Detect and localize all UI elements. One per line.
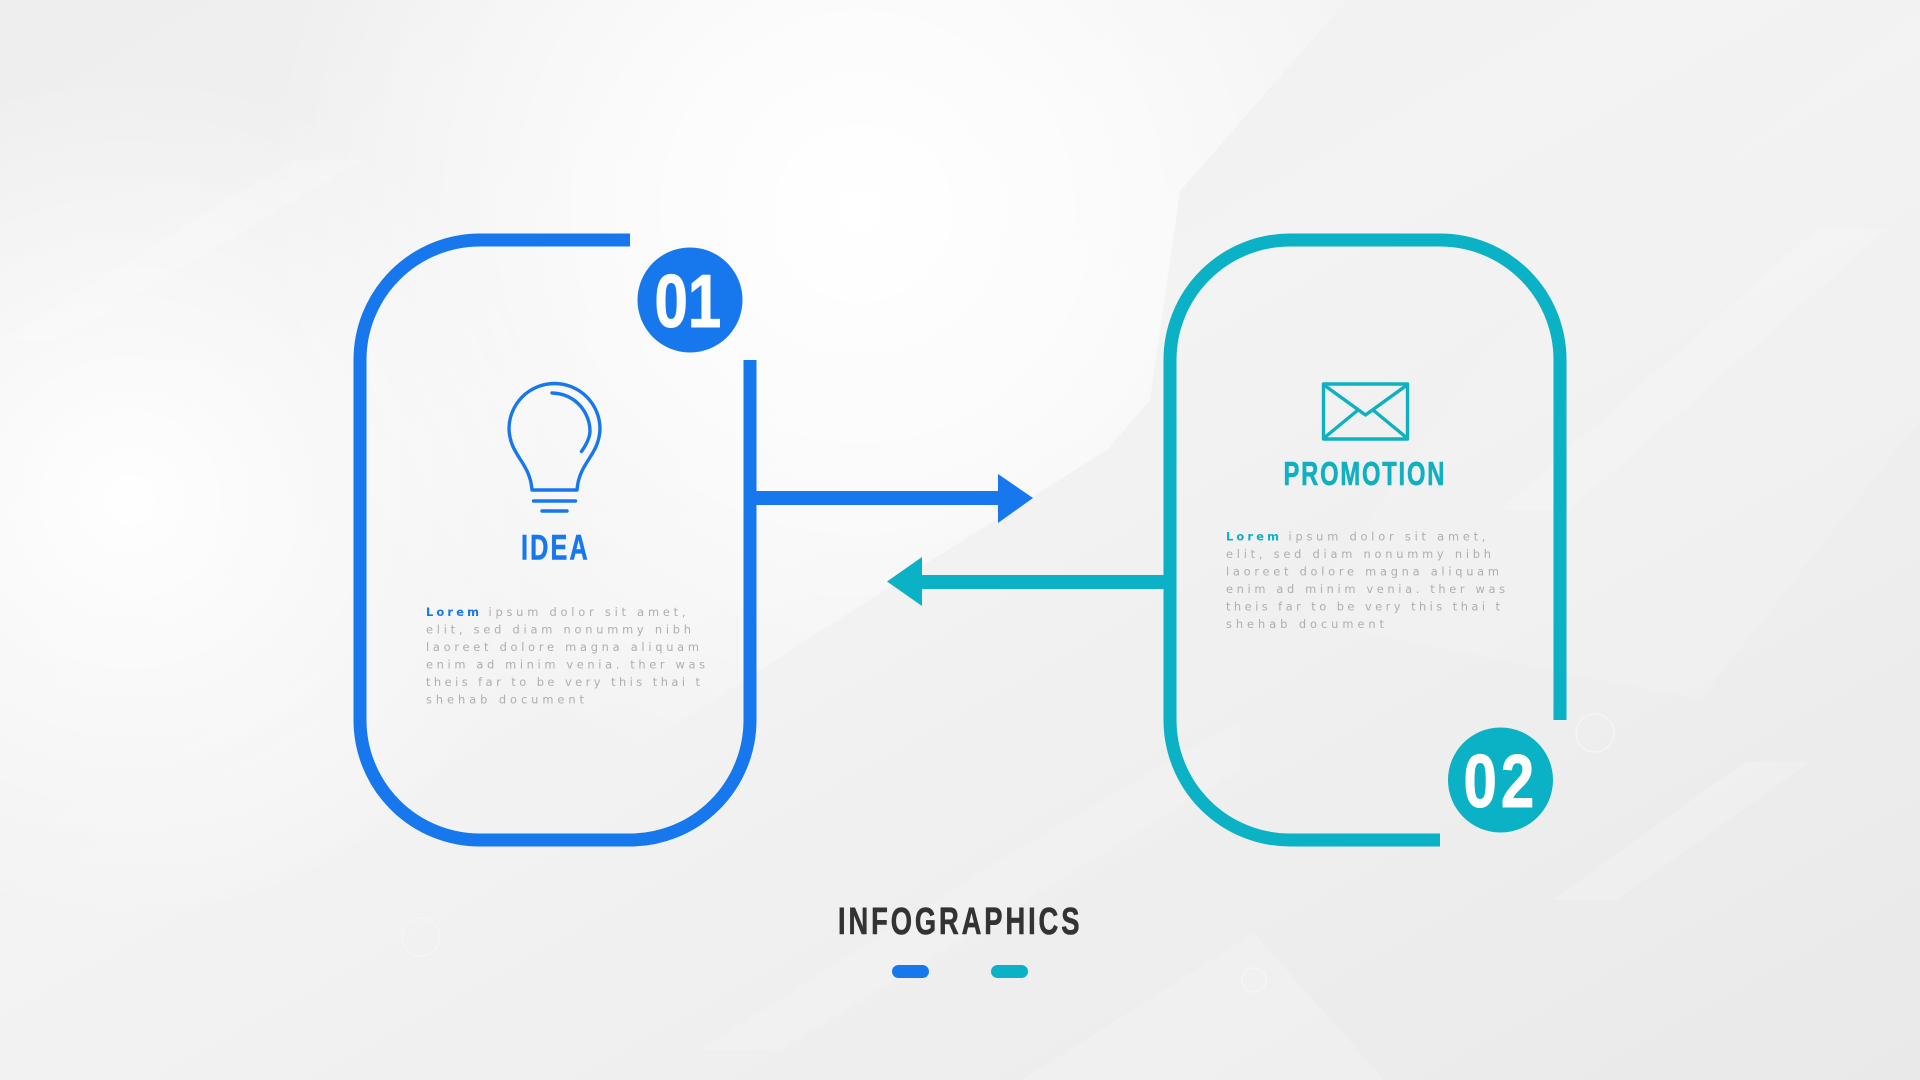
text block: promotion description: elit, sed diam nonummy nibh xyxy=(1226,547,1491,561)
text block: idea description: shehab document xyxy=(426,692,585,706)
heading: idea: IDEA xyxy=(521,529,590,568)
legend pill: blue xyxy=(892,965,929,978)
arrow: promotion to idea xyxy=(887,557,1164,606)
badge 01: 01 xyxy=(654,261,721,344)
text block: idea description: theis far to be very this thai t xyxy=(426,675,701,689)
text block: idea description: laoreet dolore magna aliquam xyxy=(426,640,699,654)
text block: idea description: elit, sed diam nonummy nibh xyxy=(426,622,691,636)
legend pill: teal xyxy=(991,965,1028,978)
blue frame outline xyxy=(360,240,750,840)
panel: promotion xyxy=(1170,240,1560,840)
panel: idea xyxy=(360,240,750,840)
text block: promotion description: Lorem xyxy=(1226,530,1279,544)
text block: idea description: ipsum dolor sit amet, xyxy=(488,605,686,619)
text block: promotion description: laoreet dolore magna aliquam xyxy=(1226,564,1499,578)
teal frame outline xyxy=(1170,240,1560,840)
icon: envelope xyxy=(1324,384,1408,439)
badge 01 xyxy=(638,248,742,352)
text block: promotion description: ipsum dolor sit amet, xyxy=(1288,530,1486,544)
text block: promotion description: theis far to be very this thai t xyxy=(1226,600,1501,614)
text block: promotion description: enim ad minim venia. ther was xyxy=(1226,582,1505,596)
arrow: idea to promotion xyxy=(756,474,1033,523)
text block: idea description xyxy=(426,605,705,706)
decorative rings xyxy=(402,714,1614,992)
icon: light bulb xyxy=(509,384,600,511)
badge 02: 02 xyxy=(1464,741,1538,824)
text block: promotion description: shehab document xyxy=(1226,617,1385,631)
title: INFOGRAPHICS xyxy=(838,901,1082,943)
text block: promotion description xyxy=(1226,530,1505,631)
text block: idea description: Lorem xyxy=(426,605,479,619)
text block: idea description: enim ad minim venia. ther was xyxy=(426,658,705,672)
heading: promotion: PROMOTION xyxy=(1284,456,1446,493)
badge 02 xyxy=(1448,728,1553,832)
